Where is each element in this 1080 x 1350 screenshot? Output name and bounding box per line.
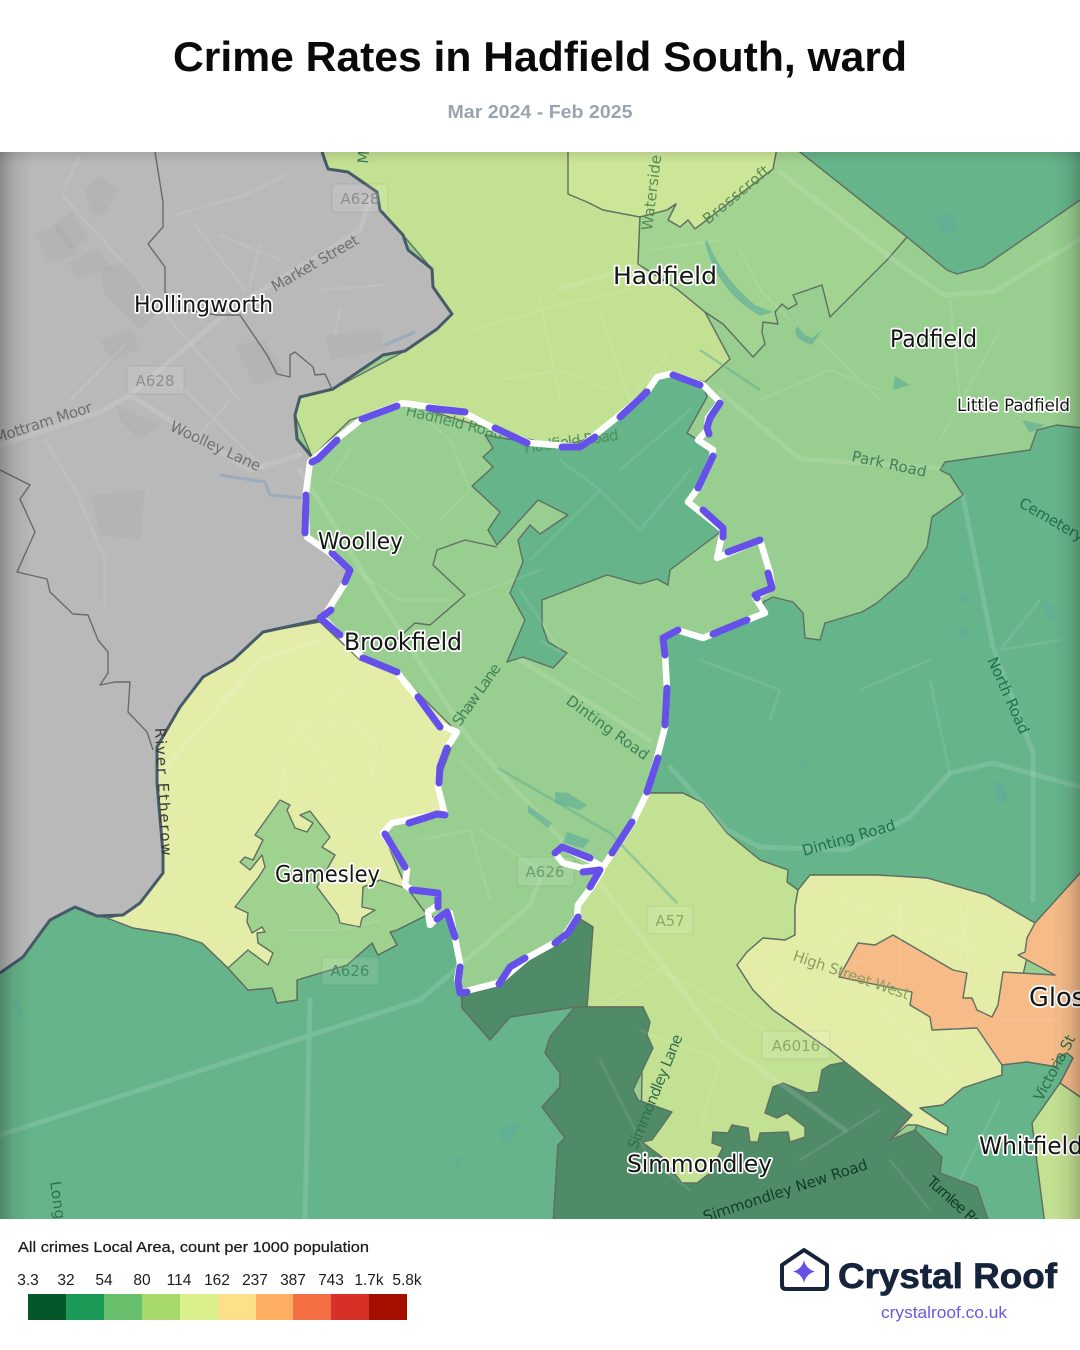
grey region district lines bbox=[0, 152, 332, 750]
subtitle: date range: Mar 2024 - Feb 2025 bbox=[448, 102, 632, 122]
place labels: Simmondley bbox=[627, 1150, 772, 1178]
street labels: Waterside bbox=[638, 154, 665, 231]
ward boundary: Hadfield South bbox=[305, 374, 772, 993]
brand name: Crystal Roof bbox=[838, 1257, 1057, 1296]
street labels: Dinting Road bbox=[800, 816, 897, 860]
area: Glossop pale yellow bbox=[737, 875, 1035, 1140]
area: east dark green bbox=[647, 425, 1080, 923]
road number badges: A628 bbox=[341, 190, 379, 208]
street labels: Simmondley New Road bbox=[701, 1156, 870, 1226]
road number badges: A628 bbox=[136, 372, 174, 390]
area: Simmondley darkest green bbox=[542, 1007, 990, 1225]
street labels: River Etherow bbox=[151, 727, 176, 856]
place labels: Little Padfield bbox=[957, 396, 1070, 416]
street labels: Market Street bbox=[268, 231, 362, 295]
road number badges: A626 bbox=[331, 962, 369, 980]
legend scale values: 237 bbox=[242, 1272, 268, 1289]
street labels: M bbox=[354, 150, 373, 164]
boundary white casing bbox=[305, 374, 772, 993]
roads and streets texture bbox=[0, 155, 1080, 1219]
logo: Crystal Roof bbox=[782, 1250, 1057, 1322]
area: far south east light green bbox=[1032, 1083, 1080, 1225]
water features bbox=[14, 212, 1058, 1168]
area: south darkest green bbox=[462, 917, 593, 1040]
legend scale values: 32 bbox=[57, 1272, 75, 1289]
legend scale values: 3.3 bbox=[17, 1272, 39, 1289]
place labels: Gamesley bbox=[275, 862, 380, 888]
street labels: Park Road bbox=[850, 447, 928, 481]
area: Glossop orange bbox=[839, 870, 1080, 1099]
street labels: Brosscroft bbox=[699, 161, 773, 228]
place labels: Padfield bbox=[890, 325, 977, 353]
road number badges: A6016 bbox=[772, 1037, 820, 1055]
area: Gamesley green pocket bbox=[228, 800, 427, 1003]
street labels: Simmondley Lane bbox=[624, 1032, 686, 1151]
place labels: Woolley bbox=[318, 529, 403, 555]
area: north Hadfield paler pocket bbox=[568, 148, 777, 229]
place labels: Hollingworth bbox=[134, 293, 273, 318]
street labels: Victoria St bbox=[1030, 1032, 1079, 1104]
ward interior boundaries bbox=[385, 540, 497, 650]
area: grey no-data region bbox=[0, 152, 452, 973]
map edge vignette bbox=[0, 152, 1080, 1219]
legend scale values: 5.8k bbox=[392, 1272, 422, 1289]
area: Whitfield green bbox=[915, 1053, 1073, 1225]
street labels: Dinting Road bbox=[563, 692, 653, 764]
legend scale values: 162 bbox=[204, 1272, 230, 1289]
legend scale values: 114 bbox=[167, 1272, 192, 1289]
street labels: Turnlee Road bbox=[923, 1172, 998, 1242]
area: south west pale yellow bbox=[107, 622, 457, 1003]
area: north band green bbox=[638, 148, 907, 357]
area: Hadfield light green bbox=[296, 152, 731, 456]
place labels: Hadfield bbox=[613, 262, 717, 290]
street labels: Hadfield Road bbox=[404, 401, 505, 443]
map base: mid-crime green bbox=[106, 201, 1080, 1138]
road number badges: A57 bbox=[655, 912, 685, 930]
legend bbox=[17, 1239, 422, 1320]
area: south west dark green bbox=[0, 907, 575, 1225]
street labels: High Street West bbox=[791, 947, 912, 1004]
road number badges: A626 bbox=[526, 863, 564, 881]
place labels: Brookfield bbox=[344, 628, 462, 656]
river boundary of grey region bbox=[0, 152, 452, 973]
boundary purple dashes bbox=[305, 375, 772, 993]
street labels: Woolley Lane bbox=[167, 417, 264, 475]
street labels: Long bbox=[46, 1180, 69, 1220]
icon: house with star bbox=[782, 1250, 827, 1289]
legend scale values: 80 bbox=[133, 1272, 151, 1289]
grey region building blocks bbox=[54, 225, 112, 272]
title: Crime Rates in Hadfield South, ward bbox=[173, 33, 907, 80]
legend scale values: 743 bbox=[318, 1272, 344, 1289]
legend scale values: 387 bbox=[280, 1272, 306, 1289]
area: ward centre dark green bbox=[472, 374, 723, 668]
railway line bbox=[498, 350, 760, 903]
area: A57 light green bbox=[577, 793, 850, 1200]
legend title: All crimes Local Area, count per 1000 population bbox=[18, 1239, 369, 1256]
legend colour bar bbox=[28, 1294, 407, 1320]
road number badges bbox=[127, 184, 830, 1059]
street labels: North Road bbox=[983, 654, 1033, 737]
area: top right dark green bbox=[795, 148, 1080, 274]
legend scale values bbox=[17, 1272, 422, 1289]
legend scale values: 54 bbox=[95, 1272, 113, 1289]
website link: crystalroof.co.uk bbox=[881, 1304, 1008, 1322]
legend scale values: 1.7k bbox=[354, 1272, 384, 1289]
street labels: Hadfield Road bbox=[523, 426, 620, 457]
place labels bbox=[134, 262, 1080, 1178]
street labels: Shaw Lane bbox=[449, 660, 505, 729]
